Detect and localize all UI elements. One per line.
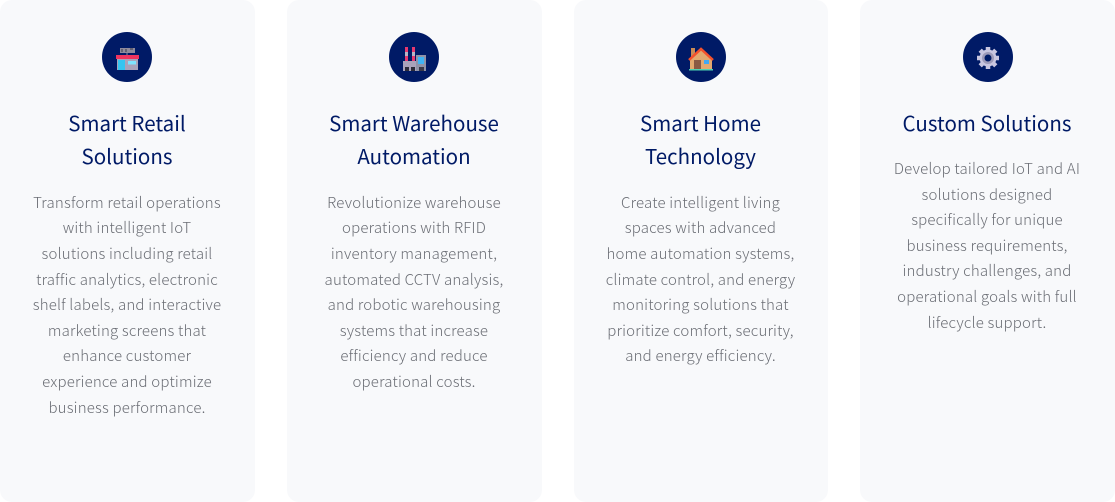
description: [894, 158, 1080, 333]
description: [325, 192, 503, 392]
heading: [640, 107, 761, 170]
description: prioritize comfort, security,: [607, 320, 794, 341]
panel: custom solutions: [860, 0, 1115, 502]
heading: Technology: [645, 140, 756, 170]
description: [606, 192, 795, 366]
description: marketing screens that: [48, 320, 206, 341]
description: automated CCTV analysis,: [325, 269, 503, 290]
icon: house: [676, 32, 726, 82]
description: Transform retail operations: [33, 192, 221, 213]
heading: Smart Warehouse: [329, 107, 499, 137]
description: Develop tailored IoT and AI: [894, 158, 1080, 179]
panel: smart warehouse: [287, 0, 542, 502]
heading: [329, 107, 499, 170]
description: industry challenges, and: [902, 260, 1072, 281]
description: enhance customer: [63, 345, 191, 366]
description: with intelligent IoT: [63, 217, 191, 238]
description: operational goals with full: [897, 286, 1077, 307]
description: systems that increase: [340, 320, 488, 341]
heading: Smart Retail: [68, 107, 186, 137]
icon: factory: [389, 32, 439, 82]
description: lifecycle support.: [928, 312, 1046, 333]
description: Create intelligent living: [621, 192, 780, 213]
description: operational costs.: [352, 371, 476, 392]
description: inventory management,: [331, 243, 497, 264]
description: business performance.: [48, 397, 206, 418]
description: and energy efficiency.: [625, 345, 776, 366]
description: home automation systems,: [607, 243, 794, 264]
heading: Smart Home: [640, 107, 761, 137]
description: solutions designed: [922, 184, 1052, 205]
description: efficiency and reduce: [340, 345, 488, 366]
description: experience and optimize: [42, 371, 212, 392]
description: spaces with advanced: [625, 217, 776, 238]
panel: smart retail: [0, 0, 255, 502]
description: climate control, and energy: [606, 269, 795, 290]
description: business requirements,: [906, 235, 1068, 256]
description: shelf labels, and interactive: [33, 294, 221, 315]
heading: [68, 107, 186, 170]
description: monitoring solutions that: [612, 294, 789, 315]
description: solutions including retail: [42, 243, 212, 264]
description: traffic analytics, electronic: [36, 269, 218, 290]
heading: Automation: [357, 140, 471, 170]
description: [33, 192, 221, 418]
panel: smart home: [574, 0, 828, 502]
heading: Custom Solutions: [902, 107, 1071, 137]
icon: shop: [102, 32, 152, 82]
description: operations with RFID: [342, 217, 486, 238]
heading: Solutions: [82, 140, 172, 170]
description: specifically for unique: [911, 209, 1063, 230]
description: Revolutionize warehouse: [327, 192, 501, 213]
icon: gear: [963, 32, 1013, 82]
description: and robotic warehousing: [328, 294, 500, 315]
